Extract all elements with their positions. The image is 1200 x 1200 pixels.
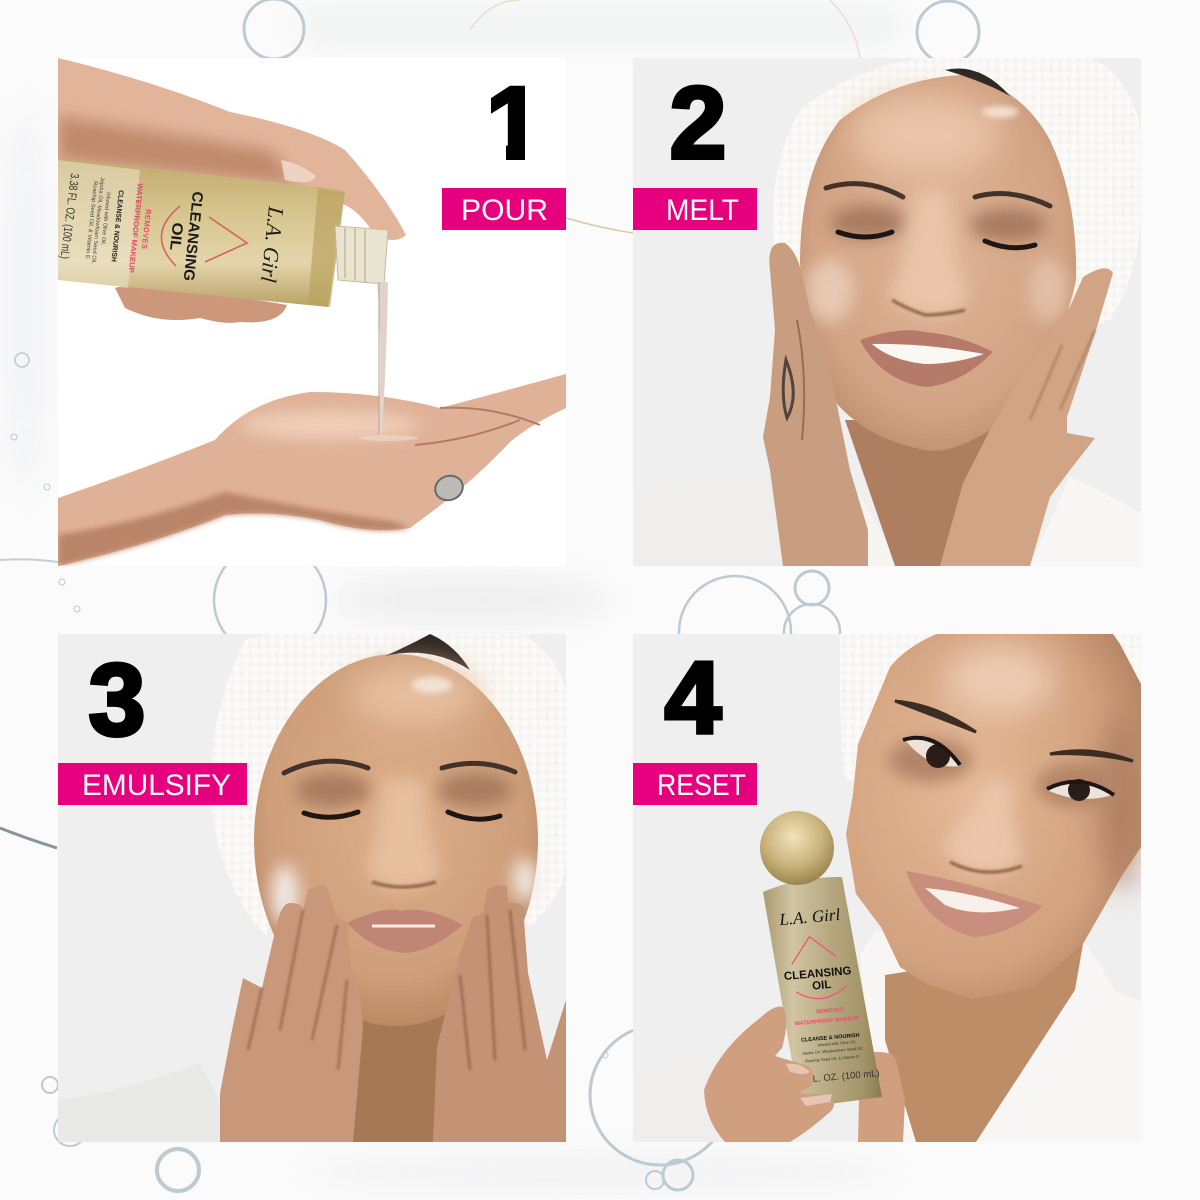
step number 1: 1	[486, 66, 543, 180]
bottle text: Jojoba Oil, Meadowfoam Seed Oil,	[90, 177, 105, 264]
step number 3: 3	[89, 643, 145, 757]
white robe	[58, 1063, 240, 1142]
bottle text: CLEANSE & NOURISH	[801, 1033, 860, 1044]
white robe	[1030, 478, 1141, 566]
lips	[347, 910, 463, 953]
bottle text: CLEANSE & NOURISH	[109, 190, 124, 262]
smile	[860, 330, 993, 387]
step number 2: 2	[670, 66, 726, 180]
thumb behind bottle	[858, 1052, 905, 1142]
bottle text: REMOVES	[816, 1007, 844, 1015]
product bottle: WATERPROOF MAKEUP	[127, 183, 145, 273]
bottle text: Jojoba Oil, Meadowfoam Seed Oil,	[802, 1045, 863, 1056]
step number 4: 4	[665, 641, 722, 755]
bottle text: CLEANSING	[783, 965, 852, 983]
left hand	[763, 243, 868, 566]
panel: step 3 emulsify	[58, 634, 566, 1142]
bottle text: Infused with Olive Oil,	[99, 192, 111, 246]
icon: upper hand holding bottle	[58, 58, 406, 323]
bottle text: Rosehip Seed Oil, & Vitamin E	[84, 181, 98, 259]
oil stream	[358, 282, 418, 441]
eyes and brows	[826, 184, 1050, 248]
neck	[353, 1014, 445, 1142]
label MELT: MELT	[666, 194, 739, 227]
product bottle	[760, 811, 882, 1108]
label RESET	[633, 763, 757, 805]
bottle text: WATERPROOF MAKEUP	[795, 1016, 860, 1027]
hand holding bottle	[704, 1006, 834, 1142]
icon: lower receiving hand	[58, 374, 566, 566]
right hand	[433, 885, 566, 1142]
label EMULSIFY	[58, 763, 247, 805]
product bottle	[58, 158, 388, 307]
bottle text: L.A. Girl	[256, 205, 289, 284]
bottle text: OIL	[166, 222, 186, 251]
bottle text: CLEANSING	[180, 191, 206, 282]
bottle text: OIL	[812, 979, 832, 993]
panel: step 4 reset	[633, 634, 1141, 1142]
label RESET: RESET	[657, 769, 746, 802]
bottle text: Rosehip Seed Oil, & Vitamin E	[805, 1054, 860, 1064]
label MELT	[633, 188, 757, 230]
face	[846, 634, 1141, 999]
bottle text: 3.38 FL. OZ. (100 mL)	[58, 173, 82, 260]
panel: step 2 melt	[633, 58, 1141, 566]
bottle text	[58, 173, 289, 284]
chest and neck	[885, 944, 1083, 1142]
nose	[365, 780, 442, 889]
label POUR	[442, 188, 566, 230]
panel: step 1 pour	[58, 58, 566, 566]
bottle text: 3.38 FL. OZ. (100 mL)	[786, 1068, 880, 1087]
product bottle: REMOVES	[140, 209, 153, 250]
label EMULSIFY: EMULSIFY	[82, 769, 231, 802]
eyes and brows	[284, 761, 515, 819]
right hand	[940, 268, 1113, 566]
bottle text: Infused with Olive Oil,	[817, 1039, 856, 1047]
bottle text	[771, 903, 880, 1087]
towel	[211, 634, 566, 937]
label POUR: POUR	[461, 194, 548, 227]
face	[800, 68, 1076, 451]
bottle text: L.A. Girl	[778, 905, 841, 929]
left hand	[220, 885, 363, 1142]
eyes and brows	[895, 701, 1133, 801]
towel	[773, 58, 1141, 330]
neck	[845, 420, 1000, 566]
towel	[840, 634, 1141, 784]
white robe	[633, 931, 1141, 1142]
nose	[945, 780, 1022, 875]
face	[254, 634, 538, 1026]
nose	[888, 190, 968, 316]
smile	[906, 871, 1043, 937]
